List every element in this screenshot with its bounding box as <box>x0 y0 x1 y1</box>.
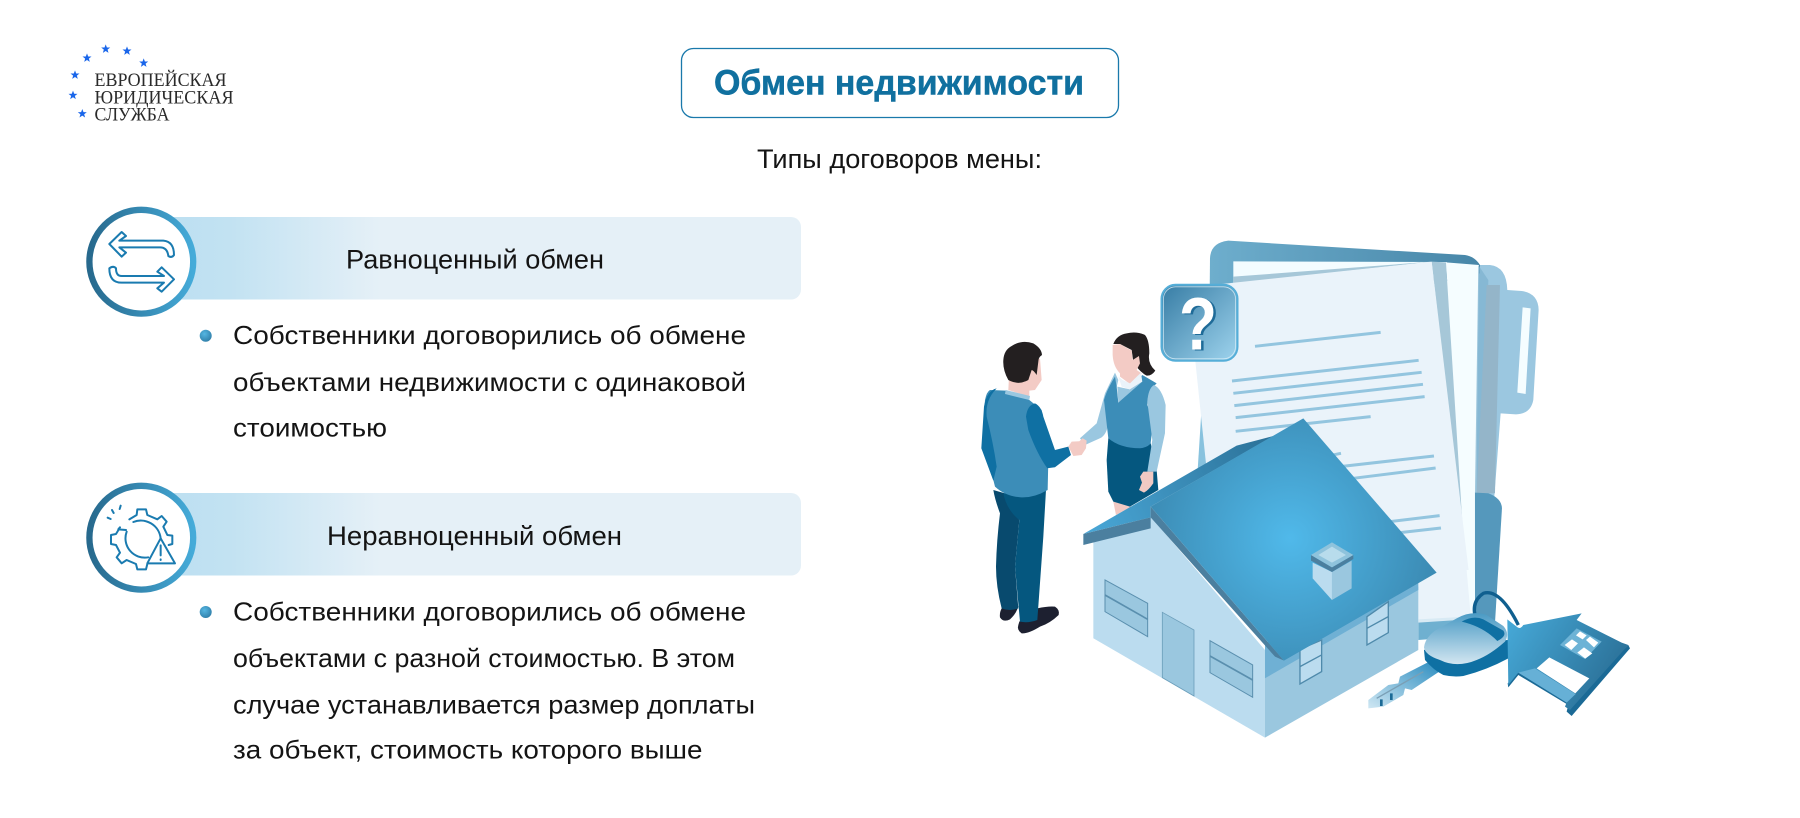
main roof <box>1151 418 1437 661</box>
white sheet sliver over pocket <box>1467 570 1475 627</box>
eave shade <box>1265 580 1418 678</box>
header bar <box>160 217 801 300</box>
house right wall <box>1265 587 1418 738</box>
icon: question mark badge: ? <box>1182 284 1219 367</box>
folder back <box>1209 241 1480 330</box>
man back arm <box>981 388 997 481</box>
page text lines <box>1232 332 1441 533</box>
logo text: СЛУЖБА <box>94 104 170 126</box>
woman blouse <box>1117 382 1142 403</box>
woman <box>1080 332 1166 515</box>
man <box>981 342 1087 633</box>
body text: Собственники договорились об обмене <box>233 597 746 627</box>
main page <box>1188 262 1475 623</box>
subtitle: Типы договоров мены: <box>757 144 1042 174</box>
panel: non-equivalent exchange <box>89 486 801 764</box>
icon: gear with warning <box>108 506 175 569</box>
folder with document <box>1188 241 1539 634</box>
back white sheet <box>1446 262 1479 617</box>
logo text: ЮРИДИЧЕСКАЯ <box>94 88 234 108</box>
folder bottom band <box>1418 617 1468 640</box>
folder front pocket <box>1475 493 1502 634</box>
logo: European Legal Service <box>68 44 234 126</box>
logo text: ЕВРОПЕЙСКАЯ <box>94 70 227 91</box>
header label: Неравноценный обмен <box>327 521 622 551</box>
folder left edge <box>1198 407 1209 470</box>
man hair <box>1003 342 1042 383</box>
woman collar <box>1118 373 1142 389</box>
gable eave <box>1083 517 1151 545</box>
icon ring <box>89 210 193 314</box>
body text: объектами недвижимости с одинаковой <box>233 367 746 397</box>
header label: Равноценный обмен <box>346 244 604 274</box>
tag door hole <box>1537 657 1589 693</box>
chimney <box>1311 542 1353 600</box>
header bar <box>160 493 801 576</box>
body text: объектами с разной стоимостью. В этом <box>233 643 735 673</box>
key head base <box>1424 640 1508 676</box>
illustration: property exchange <box>981 241 1630 738</box>
bullet <box>200 606 212 618</box>
logo text <box>94 70 234 126</box>
translucent folder strips <box>1475 265 1488 493</box>
logo stars <box>68 44 148 118</box>
key head top <box>1424 613 1507 664</box>
key blade <box>1368 663 1442 708</box>
key slot <box>1462 618 1504 641</box>
folder tabs <box>1477 265 1539 497</box>
woman legs <box>1113 502 1132 515</box>
house left wall <box>1093 517 1265 738</box>
tag window panes <box>1565 631 1598 659</box>
body text: случае устанавливается размер доплаты <box>233 689 755 719</box>
roof edge <box>1151 507 1284 661</box>
key ring <box>1474 593 1518 625</box>
tag window frame <box>1560 628 1602 659</box>
body text: стоимостью <box>233 413 387 443</box>
man upper body <box>981 342 1087 497</box>
title: Обмен недвижимости <box>714 64 1084 102</box>
man neck <box>1008 358 1042 397</box>
woman right sleeve <box>1147 385 1166 472</box>
body text: за объект, стоимость которого выше <box>233 734 702 764</box>
gable roof <box>1083 436 1273 534</box>
woman hand <box>1139 472 1153 493</box>
woman vest <box>1104 375 1157 448</box>
body text: Собственники договорились об обмене <box>233 320 746 350</box>
woman hair <box>1113 332 1155 376</box>
bullet <box>200 330 212 342</box>
icon: question mark badge: ? <box>1179 283 1217 366</box>
house tag <box>1507 613 1628 710</box>
man sweater <box>982 390 1048 497</box>
middle window <box>1210 641 1253 697</box>
house <box>1083 418 1437 738</box>
woman left sleeve <box>1080 373 1118 445</box>
man hand <box>1068 438 1087 456</box>
icon: swap arrows <box>109 232 174 292</box>
door <box>1162 612 1194 696</box>
icon: question mark badge <box>1162 283 1238 367</box>
body text <box>233 320 746 443</box>
tag lower strip <box>1518 668 1576 703</box>
panel: equivalent exchange <box>89 210 801 443</box>
body text <box>233 597 755 764</box>
key with house tag <box>1368 593 1630 716</box>
man front arm <box>1026 403 1071 468</box>
left window <box>1105 580 1148 637</box>
man collar <box>1005 390 1030 400</box>
tab slot <box>1517 307 1531 394</box>
woman skirt <box>1107 438 1158 507</box>
woman face <box>1113 344 1142 384</box>
house tag edge <box>1508 645 1630 716</box>
right windows <box>1300 602 1388 684</box>
title box <box>682 48 1118 118</box>
man trousers and shoes <box>993 490 1059 633</box>
grey sheet edge <box>1432 262 1468 617</box>
inner sheet <box>1233 261 1447 283</box>
icon ring <box>89 486 193 590</box>
